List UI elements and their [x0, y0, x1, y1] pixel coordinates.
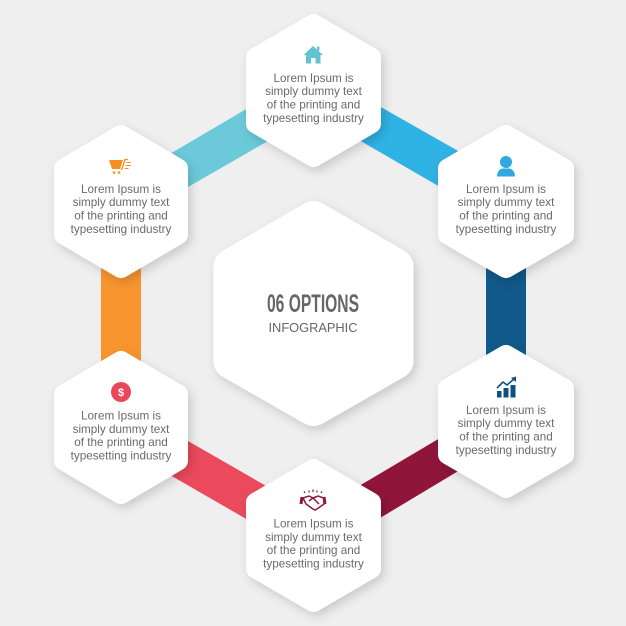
icon: dollar coin: $ — [118, 387, 124, 399]
text: top option: typesetting industry — [263, 112, 364, 125]
icon: house — [304, 46, 323, 64]
icon: shopping cart — [109, 160, 131, 174]
title: 06 options: 06 OPTIONS — [267, 290, 359, 318]
text: top option: Lorem Ipsum is — [274, 72, 354, 85]
text: lower right option: simply dummy text — [458, 417, 555, 430]
text: bottom option: of the printing and — [267, 544, 360, 557]
text: bottom option: Lorem Ipsum is — [274, 518, 354, 530]
text: top option — [263, 72, 364, 125]
text: lower right option: Lorem Ipsum is — [466, 404, 546, 417]
panel: upper left option — [64, 135, 178, 268]
text: bottom option: simply dummy text — [265, 531, 363, 544]
panel: top option — [256, 24, 371, 157]
text: upper right option: typesetting industry — [456, 223, 557, 236]
panel: lower left option — [64, 361, 178, 494]
text: upper left option: Lorem Ipsum is — [81, 183, 161, 196]
text: upper left option: typesetting industry — [71, 223, 172, 236]
panel: bottom option — [256, 469, 371, 602]
band: navy connector — [486, 262, 526, 362]
text: lower left option: simply dummy text — [73, 423, 170, 436]
icon: person — [497, 156, 515, 176]
text: lower left option: of the printing and — [74, 436, 168, 449]
text: upper left option: simply dummy text — [73, 196, 170, 209]
text: upper left option — [71, 183, 172, 236]
icon: handshake — [301, 490, 325, 510]
text: upper left option: of the printing and — [74, 210, 168, 222]
text: lower left option: typesetting industry — [71, 450, 172, 462]
icon: rising chart — [497, 376, 516, 398]
band: teal connector — [168, 108, 268, 187]
text: upper right option: of the printing and — [459, 210, 553, 222]
band: red connector — [170, 441, 268, 520]
text: lower right option: typesetting industry — [456, 444, 557, 457]
text: lower right option — [456, 404, 557, 457]
text: lower left option — [71, 410, 172, 462]
text: lower right option: of the printing and — [459, 430, 553, 444]
text: top option: simply dummy text — [265, 85, 363, 98]
subtitle: infographic: INFOGRAPHIC — [268, 320, 358, 335]
panel: lower right option — [448, 355, 564, 488]
text: lower left option: Lorem Ipsum is — [81, 410, 161, 422]
text: upper right option — [456, 183, 557, 236]
text: bottom option: typesetting industry — [263, 558, 364, 570]
band: crimson connector — [359, 438, 460, 518]
panel: upper right option — [448, 135, 564, 268]
text: upper right option: Lorem Ipsum is — [466, 183, 546, 196]
band: orange connector — [101, 262, 141, 362]
center hexagon — [232, 219, 396, 408]
text: bottom option — [263, 518, 364, 570]
text: top option: of the printing and — [267, 98, 360, 112]
band: blue connector — [359, 106, 460, 187]
text: upper right option: simply dummy text — [458, 196, 555, 209]
